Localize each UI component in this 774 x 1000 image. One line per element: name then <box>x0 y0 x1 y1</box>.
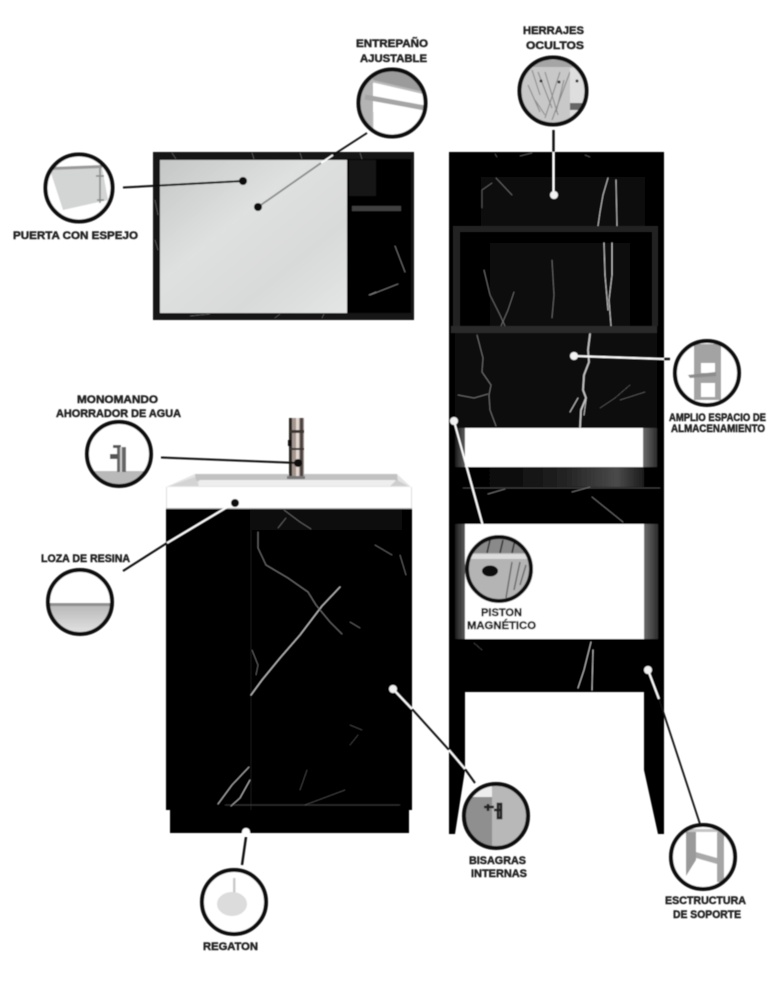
callout: estructura de soporte <box>644 666 746 921</box>
callout: herrajes ocultos <box>518 25 588 199</box>
callout: regaton <box>202 828 266 953</box>
callout: monomando ahorrador de agua: MONOMANDO <box>77 394 158 406</box>
callout: entrepano ajustable: AJUSTABLE <box>360 53 427 65</box>
callout: monomando ahorrador de agua: AHORRADOR DE AGUA <box>56 408 181 420</box>
lower white opening <box>465 524 644 639</box>
second compartment <box>453 232 658 326</box>
callout: bisagras internas <box>389 685 528 880</box>
cabinet body <box>166 509 412 833</box>
tall storage unit <box>449 152 664 834</box>
callout: entrepano ajustable: ENTREPAÑO <box>356 37 428 50</box>
mirror door <box>160 160 347 313</box>
resin basin <box>166 474 412 509</box>
callout: regaton: REGATON <box>203 941 258 953</box>
callout: monomando ahorrador de agua <box>56 394 302 486</box>
callout: puerta con espejo <box>13 153 247 242</box>
mirror cabinet <box>153 152 414 320</box>
callout: loza de resina <box>41 499 239 634</box>
callout: loza de resina: LOZA DE RESINA <box>41 553 130 565</box>
lower shelf <box>451 326 657 333</box>
middle shelf band <box>452 467 662 523</box>
callout: bisagras internas: BISAGRAS <box>469 855 526 867</box>
sink vanity <box>166 418 412 833</box>
upper white opening <box>465 428 643 467</box>
callout: amplio espacio de almacenamiento <box>570 341 766 435</box>
callout: estructura de soporte: DE SOPORTE <box>673 909 741 921</box>
door panel with marble veins <box>455 333 657 428</box>
callout: puerta con espejo: PUERTA CON ESPEJO <box>13 230 138 242</box>
callout: amplio espacio de almacenamiento: ALMACENAMIENTO <box>671 423 765 435</box>
callout: herrajes ocultos: OCULTOS <box>526 40 584 52</box>
callout: piston magnetico <box>450 417 536 632</box>
callout: estructura de soporte: ESCTRUCTURA <box>665 895 746 907</box>
callout: bisagras internas: INTERNAS <box>471 868 527 880</box>
callout: entrepano ajustable <box>254 37 428 211</box>
callout: herrajes ocultos: HERRAJES <box>523 25 584 37</box>
callout: piston magnetico: MAGNÉTICO <box>467 619 536 632</box>
bottom band <box>449 640 664 692</box>
open shelf compartment <box>155 153 411 318</box>
top compartment <box>481 153 645 226</box>
faucet <box>287 418 305 479</box>
callout: piston magnetico: PISTON <box>481 607 522 619</box>
upper shelf <box>453 226 658 232</box>
